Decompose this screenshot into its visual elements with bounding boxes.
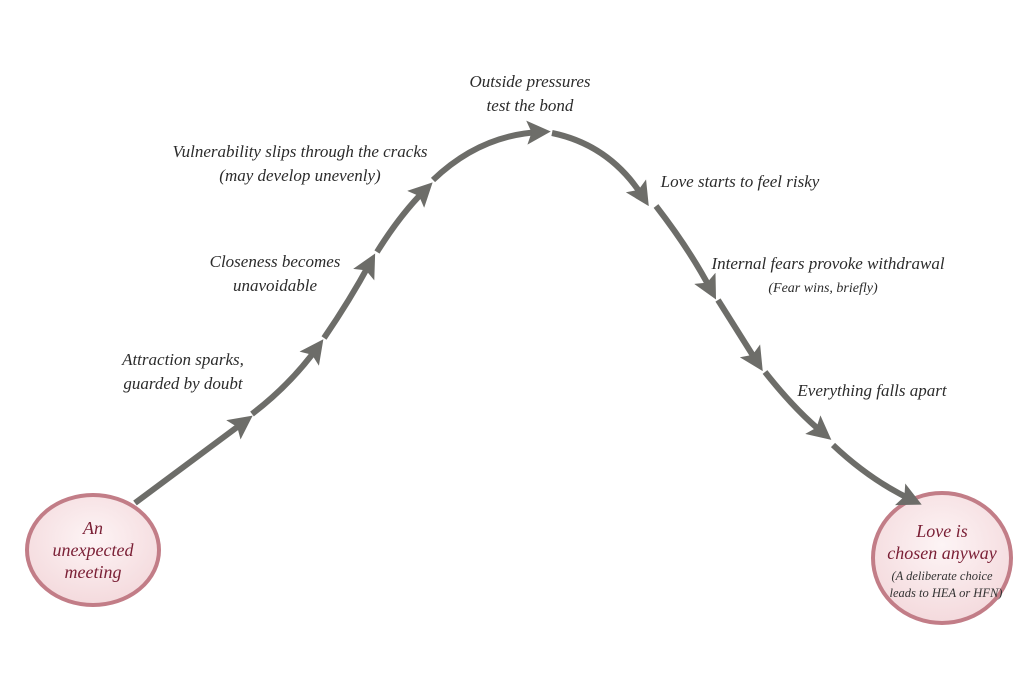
label: attraction: guarded by doubt	[123, 374, 244, 393]
label: love risky: Love starts to feel risky	[660, 172, 820, 191]
label: outside pressures: Outside pressures	[469, 72, 591, 91]
label: closeness: Closeness becomes	[210, 252, 341, 271]
node: an unexpected meeting: An	[82, 518, 103, 538]
arrow: story arc	[135, 132, 912, 503]
node: an unexpected meeting: meeting	[65, 562, 121, 582]
labels	[121, 72, 948, 400]
label: internal fears: (Fear wins, briefly)	[768, 281, 878, 296]
node: love is chosen anyway: chosen anyway	[887, 543, 997, 563]
label: outside pressures	[469, 72, 591, 115]
label: internal fears	[710, 254, 945, 296]
label: attraction	[121, 350, 244, 393]
node: love is chosen anyway: (A deliberate choice	[891, 569, 993, 583]
label: vulnerability	[173, 142, 428, 185]
node: love is chosen anyway: leads to HEA or HFN)	[890, 586, 1002, 600]
label: internal fears: Internal fears provoke withdrawal	[710, 254, 945, 273]
label: falls apart: Everything falls apart	[796, 381, 948, 400]
node: an unexpected meeting	[27, 495, 159, 605]
label: vulnerability: Vulnerability slips through the cracks	[173, 142, 428, 161]
node: love is chosen anyway: Love is	[915, 521, 968, 541]
label: closeness: unavoidable	[233, 276, 317, 295]
label: outside pressures: test the bond	[487, 96, 574, 115]
node: an unexpected meeting: unexpected	[53, 540, 134, 560]
node: love is chosen anyway	[873, 493, 1011, 623]
label: closeness	[210, 252, 341, 295]
label: vulnerability: (may develop unevenly)	[219, 166, 381, 185]
label: attraction: Attraction sparks,	[121, 350, 244, 369]
